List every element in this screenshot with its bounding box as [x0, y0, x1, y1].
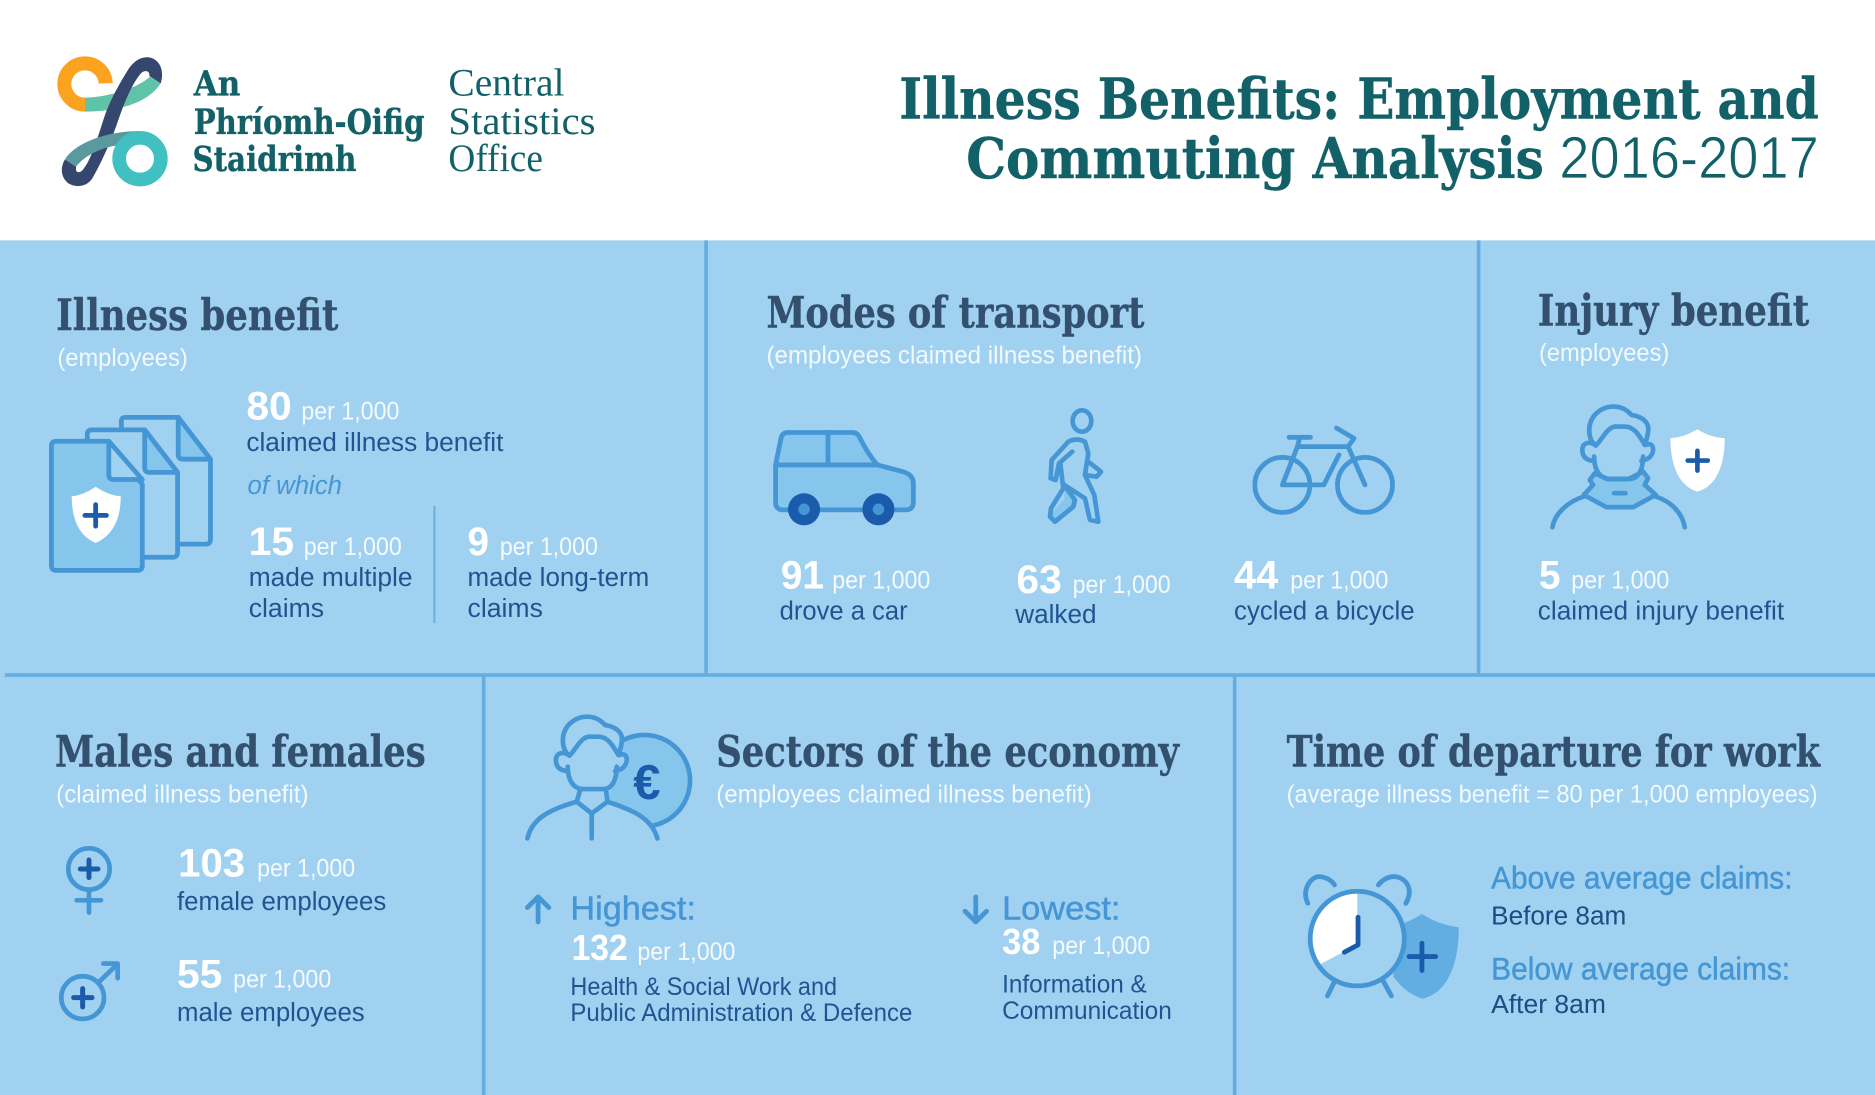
logo text: English name: Central: [448, 61, 564, 105]
highest sector: Highest:: [570, 891, 696, 928]
stat: 9 per 1,000: 9: [468, 520, 489, 564]
panel: injury benefit: [1478, 240, 1875, 674]
stat: female: per 1,000: [257, 855, 355, 883]
panel: illness benefit: [0, 240, 706, 674]
lowest sector: 38: [1002, 922, 1040, 962]
stat: 80 per 1,000: claimed illness benefit: [246, 427, 504, 457]
icon: euro sign: €: [633, 756, 661, 810]
stat: injury: claimed injury benefit: [1538, 595, 1785, 625]
header: [62, 57, 1819, 192]
lowest sector: Communication: [1002, 997, 1172, 1025]
stat: bicycle: [1234, 553, 1415, 625]
stat: female: [177, 842, 386, 916]
icon: person with neck brace and shield: [1552, 407, 1725, 527]
stat: 15 per 1,000: [249, 520, 413, 623]
logo text: English name: [448, 61, 596, 180]
arrow: down: [965, 897, 987, 922]
above average claims: Above average claims:: [1491, 860, 1792, 895]
panel: time of departure: [1234, 674, 1875, 1095]
stat: 80 per 1,000: 80: [246, 385, 292, 429]
icon: car: [776, 433, 913, 525]
panel: sectors of the economy: [483, 674, 1234, 1095]
stat: car: [780, 553, 930, 625]
stat: male: 55: [177, 953, 222, 997]
lowest sector: per 1,000: [1052, 932, 1150, 960]
highest sector: per 1,000: [637, 938, 735, 966]
stat: 9 per 1,000: [468, 520, 649, 623]
stat: car: per 1,000: [832, 566, 930, 594]
lowest sector: [1002, 891, 1172, 1025]
stat: walked: per 1,000: [1073, 571, 1171, 599]
lowest sector: Lowest:: [1002, 891, 1120, 928]
logo text: Irish name: Phríomh-Oifig: [194, 102, 425, 143]
below average claims: After 8am: [1491, 989, 1606, 1019]
stat: female: female employees: [177, 886, 386, 916]
subheading: (employees claimed illness benefit): [716, 781, 1092, 808]
stat: 9 per 1,000: claims: [468, 593, 543, 623]
icon: walking person: [1050, 410, 1101, 522]
icon: person with euro bubble: [527, 717, 690, 838]
title: Commuting Analysis: [966, 126, 1544, 192]
icon: male symbol: [61, 964, 118, 1019]
stat: bicycle: cycled a bicycle: [1234, 595, 1415, 625]
subheading: (employees): [57, 345, 188, 372]
icon: alarm clock with shield: [1306, 876, 1459, 999]
below average claims: [1491, 951, 1790, 1019]
heading: Injury benefit: [1538, 286, 1809, 336]
subheading: (employees): [1539, 340, 1669, 367]
of which label: of which: [248, 470, 342, 500]
stat: 9 per 1,000: made long-term: [468, 562, 649, 592]
icon: bicycle: [1255, 428, 1392, 512]
stat: bicycle: per 1,000: [1290, 566, 1388, 594]
highest sector: Health & Social Work and: [570, 973, 837, 1001]
above average claims: [1491, 860, 1792, 930]
icon: documents with shield: [51, 417, 210, 570]
stat: walked: 63: [1016, 558, 1062, 602]
stat: 15 per 1,000: per 1,000: [304, 533, 402, 561]
below average claims: Below average claims:: [1491, 951, 1790, 986]
subheading: (claimed illness benefit): [56, 781, 309, 808]
stat: car: 91: [781, 553, 824, 597]
title: 2016-2017: [1559, 124, 1819, 191]
highest sector: [570, 891, 912, 1027]
logo text: English name: Office: [448, 136, 543, 180]
logo text: English name: Statistics: [448, 99, 596, 143]
arrow: up: [527, 897, 549, 922]
highest sector: 132: [572, 928, 628, 968]
stat: injury: [1538, 553, 1785, 625]
highest sector: Public Administration & Defence: [570, 999, 912, 1027]
logo text: Irish name: [193, 64, 425, 180]
heading: Illness benefit: [56, 291, 339, 341]
subheading: (average illness benefit = 80 per 1,000 employees): [1287, 781, 1818, 808]
heading: Sectors of the economy: [716, 728, 1181, 778]
stat: walked: walked: [1014, 599, 1097, 629]
title: [899, 66, 1819, 192]
stat: bicycle: 44: [1234, 553, 1278, 597]
icon: female symbol: [68, 848, 110, 913]
stat: 80 per 1,000: per 1,000: [301, 398, 399, 426]
lowest sector: Information &: [1002, 971, 1147, 999]
stat: 9 per 1,000: per 1,000: [500, 533, 598, 561]
stat: male: male employees: [177, 997, 365, 1027]
logo mark: [62, 57, 162, 186]
stat: 80 per 1,000: [246, 385, 504, 457]
heading: Males and females: [55, 728, 426, 778]
stat: male: per 1,000: [233, 966, 331, 994]
stat: walked: [1014, 558, 1171, 629]
above average claims: Before 8am: [1491, 900, 1626, 930]
stat: 15 per 1,000: made multiple: [249, 562, 413, 592]
logo text: Irish name: Staidrimh: [193, 139, 356, 180]
stat: male: [177, 953, 365, 1027]
stat: 15 per 1,000: 15: [249, 520, 294, 564]
logo text: Irish name: An: [193, 64, 240, 105]
stat: 15 per 1,000: claims: [249, 593, 324, 623]
stat: car: drove a car: [780, 595, 908, 625]
stat: injury: 5: [1539, 553, 1561, 597]
stat: injury: per 1,000: [1571, 566, 1669, 594]
subheading: (employees claimed illness benefit): [767, 343, 1142, 370]
panel: males and females: [0, 674, 483, 1095]
panel: modes of transport: [706, 240, 1478, 674]
stat: female: 103: [178, 842, 245, 886]
heading: Modes of transport: [767, 289, 1144, 339]
